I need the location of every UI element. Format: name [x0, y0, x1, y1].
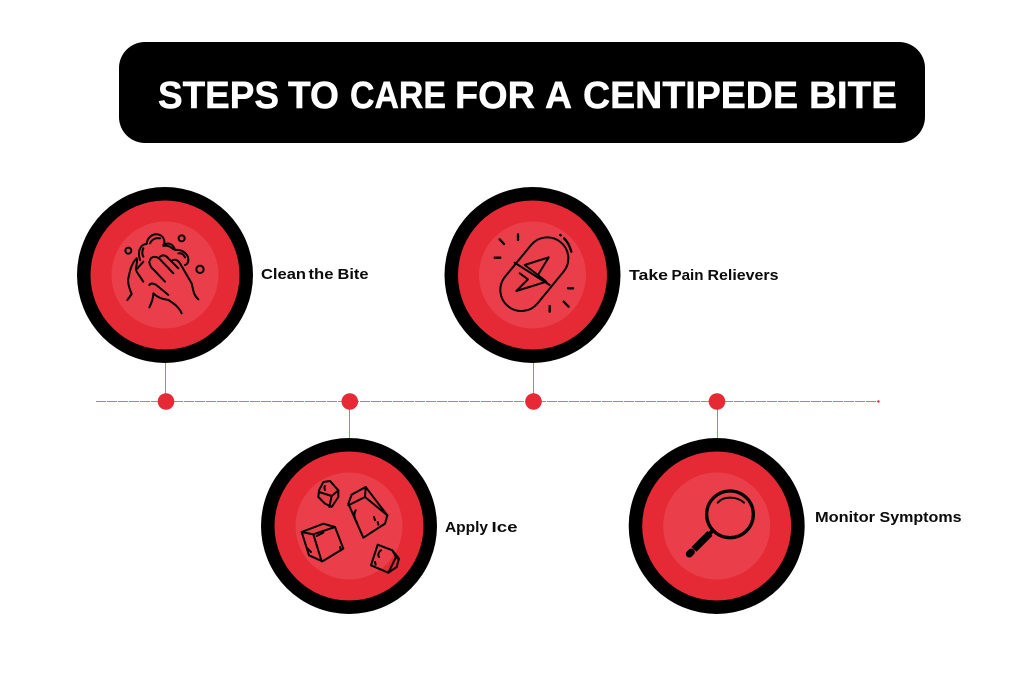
- step 2: apply ice: [261, 438, 518, 614]
- badge: take pain relievers: [444, 187, 620, 363]
- title banner: [119, 42, 925, 143]
- icon: pill with pain bolt: [495, 234, 573, 312]
- label: clean the bite: Bite: [338, 266, 368, 283]
- step 4: monitor symptoms: [629, 438, 962, 614]
- title banner: STEPS: [158, 75, 279, 117]
- label: clean the bite: Clean: [261, 266, 306, 283]
- badge: apply ice: [261, 438, 437, 614]
- label: apply ice: Ice: [492, 519, 518, 536]
- title banner: CENTIPEDE: [583, 75, 798, 117]
- label: monitor symptoms: [815, 509, 962, 526]
- label: monitor symptoms: Symptoms: [880, 509, 962, 526]
- step 1: clean the bite: [77, 187, 368, 363]
- icon: washing hands: [125, 234, 204, 313]
- badge: monitor symptoms: [629, 438, 805, 614]
- icon: magnifying glass: [689, 491, 753, 554]
- label: monitor symptoms: Monitor: [815, 509, 875, 526]
- label: take pain relievers: Take: [629, 267, 668, 284]
- title banner: TO: [288, 75, 339, 117]
- label: apply ice: [445, 519, 518, 536]
- badge: clean the bite: [77, 187, 253, 363]
- label: take pain relievers: Relievers: [708, 267, 778, 284]
- step 3: take pain relievers: [444, 187, 778, 363]
- title banner: FOR: [455, 75, 535, 117]
- title banner: CARE: [350, 75, 446, 117]
- label: take pain relievers: [629, 267, 778, 284]
- icon: ice cubes: [302, 481, 399, 573]
- label: clean the bite: the: [308, 266, 334, 283]
- label: clean the bite: [261, 266, 368, 283]
- label: apply ice: Apply: [445, 519, 489, 536]
- title banner: BITE: [809, 75, 897, 117]
- title banner: A: [545, 75, 572, 117]
- timeline: [96, 362, 880, 440]
- label: take pain relievers: Pain: [672, 267, 704, 284]
